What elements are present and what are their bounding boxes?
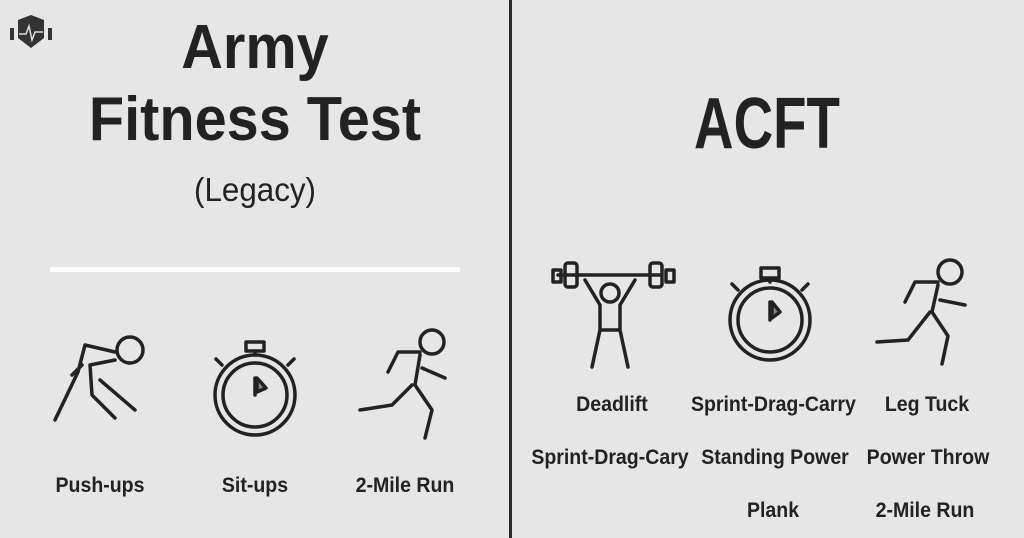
title: Army Fitness Test (89, 13, 421, 154)
icon: push-up (55, 337, 143, 420)
divider line (509, 0, 512, 538)
labels right: Sprint-Drag-Carry (691, 393, 856, 416)
labels right: Sprint-Drag-Cary (531, 446, 689, 469)
title: Army Fitness Test: Fitness Test (89, 85, 421, 154)
labels left: Push-ups (56, 474, 144, 497)
labels left (56, 474, 454, 497)
labels right: Standing Power (701, 446, 849, 469)
labels right (531, 393, 990, 522)
logo (10, 15, 52, 48)
title: Army Fitness Test: Army (181, 13, 329, 82)
labels right: Plank (747, 499, 799, 522)
labels right: Leg Tuck (885, 393, 969, 416)
labels right: 2-Mile Run (876, 499, 974, 522)
labels right: Deadlift (576, 393, 648, 416)
icon: runner right (877, 260, 965, 364)
labels right: Power Throw (867, 446, 989, 469)
icon: stopwatch right (730, 268, 810, 360)
labels left: 2-Mile Run (356, 474, 454, 497)
icon: runner left (360, 330, 445, 438)
subtitle: Legacy: (Legacy) (194, 171, 316, 208)
white rule (50, 267, 460, 272)
icon: stopwatch left (215, 342, 295, 435)
title: ACFT: ACFT (694, 84, 840, 164)
labels left: Sit-ups (222, 474, 288, 497)
icon: weightlifter (553, 263, 674, 367)
